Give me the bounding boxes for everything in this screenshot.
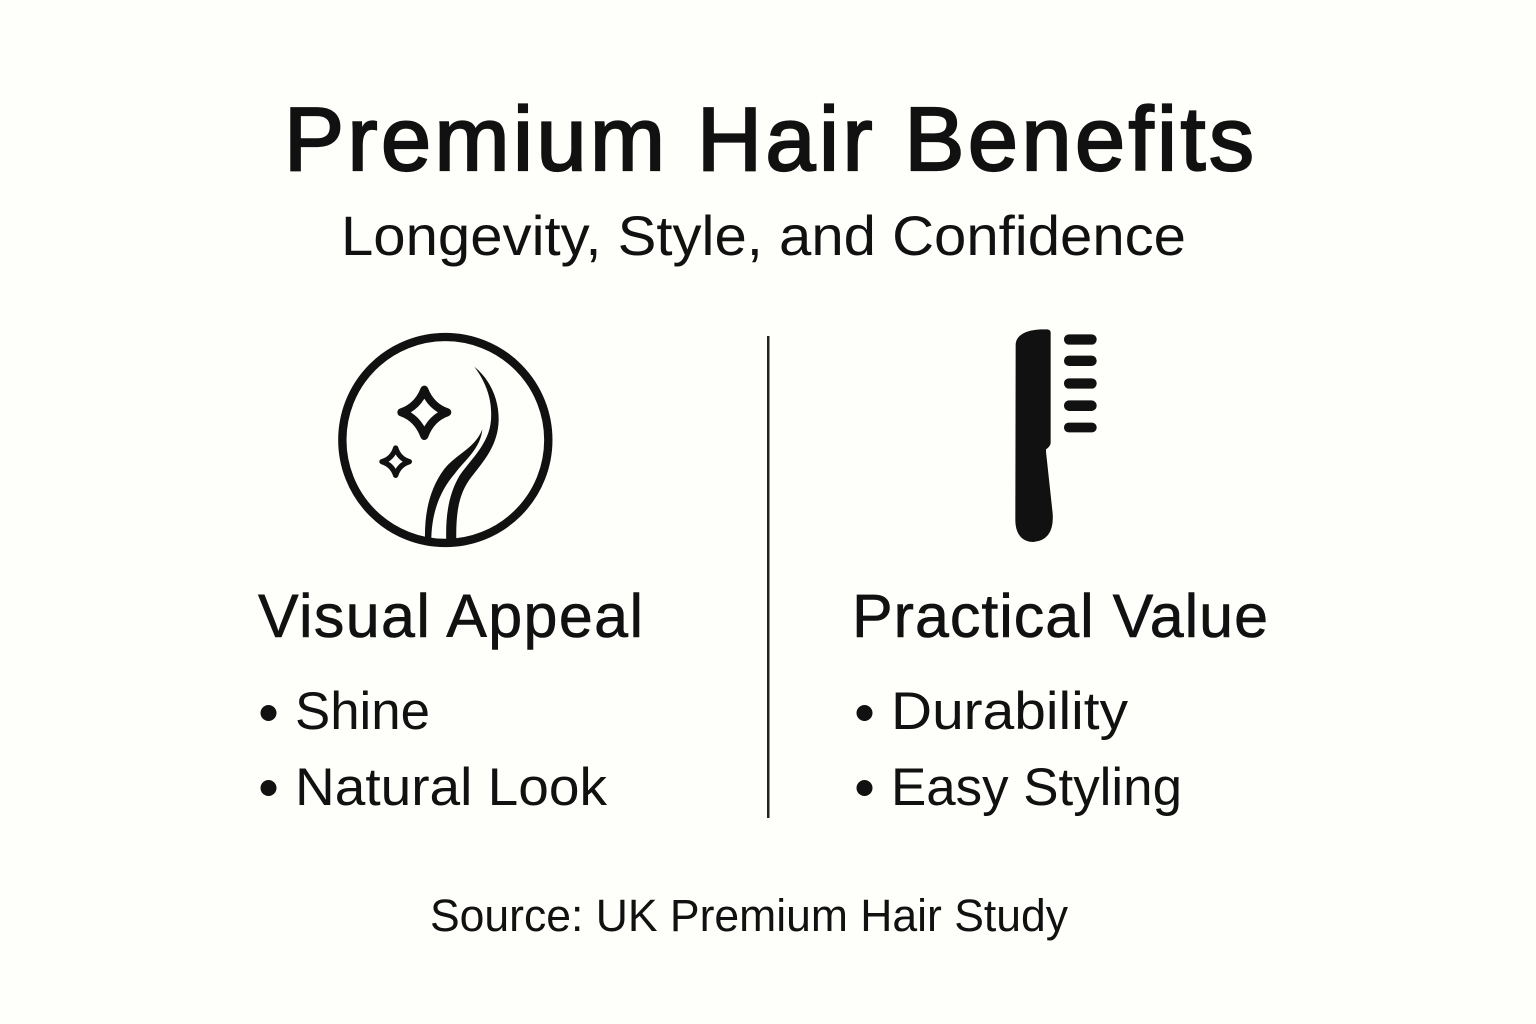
heading: visual appeal: Visual Appeal bbox=[258, 582, 643, 650]
list item: natural look: Natural Look bbox=[295, 758, 608, 817]
panel: visual appeal bbox=[258, 337, 643, 817]
source note: Source: UK Premium Hair Study bbox=[430, 890, 1068, 941]
title: Premium Hair Benefits bbox=[284, 90, 1254, 190]
icon: hair with sparkles bbox=[342, 337, 548, 543]
subtitle: Longevity, Style, and Confidence bbox=[341, 204, 1186, 267]
list item: easy styling: Easy Styling bbox=[891, 758, 1182, 817]
icon: comb bbox=[1015, 329, 1097, 542]
divider bbox=[767, 336, 770, 818]
list item: durability: Durability bbox=[891, 682, 1129, 741]
list item: shine: Shine bbox=[295, 682, 430, 741]
heading: practical value: Practical Value bbox=[852, 582, 1268, 650]
panel: practical value bbox=[852, 329, 1268, 817]
